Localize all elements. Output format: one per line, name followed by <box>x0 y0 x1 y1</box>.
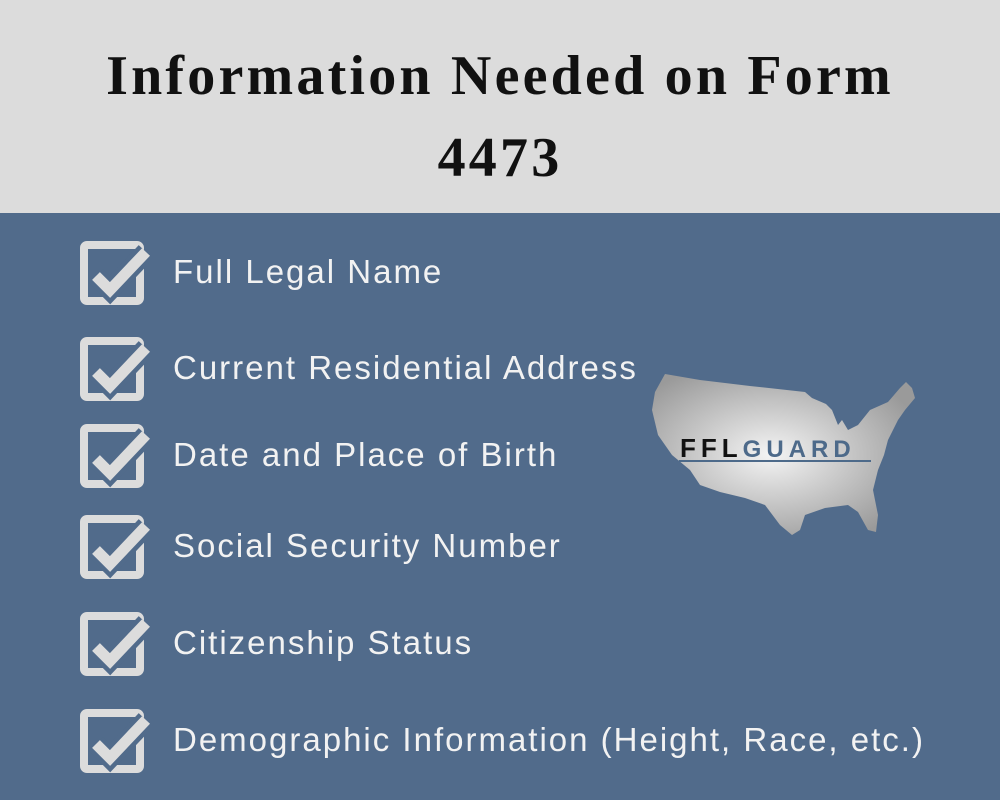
logo: FFLGuard US map: FFLGUARD <box>680 433 856 463</box>
item: demographic: Demographic Information (Height, Race, etc.) <box>173 721 925 758</box>
title: 4473 <box>438 127 562 189</box>
item: citizenship <box>80 612 473 676</box>
header band <box>0 0 1000 213</box>
item: full legal name: Full Legal Name <box>173 253 443 290</box>
item: address <box>80 337 638 401</box>
item: full legal name <box>80 241 443 305</box>
item: address: Current Residential Address <box>173 349 638 386</box>
item: demographic <box>80 709 925 773</box>
item: birth <box>80 424 558 488</box>
item: citizenship: Citizenship Status <box>173 624 473 661</box>
item: ssn <box>80 515 562 579</box>
item: birth: Date and Place of Birth <box>173 436 558 473</box>
title <box>106 45 894 189</box>
item: ssn: Social Security Number <box>173 527 562 564</box>
title: Information Needed on Form <box>106 45 894 107</box>
